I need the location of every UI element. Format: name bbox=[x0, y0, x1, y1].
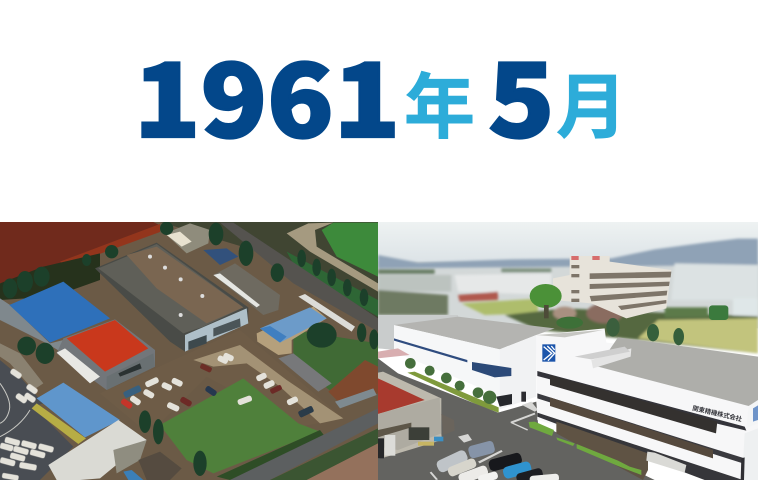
title: date 1961年5月: 年 bbox=[404, 69, 475, 148]
title: date 1961年5月 bbox=[134, 23, 627, 167]
building: blue and red roof factory bbox=[0, 282, 155, 390]
title: date 1961年5月: 月 bbox=[556, 69, 627, 148]
parked cars bbox=[435, 440, 559, 480]
title: date 1961年5月: 1961 bbox=[134, 23, 400, 167]
photo: aerial view of the factory in 1961 bbox=[0, 222, 379, 480]
building: lower-left sheds and office bbox=[32, 383, 182, 480]
building sign: company name: 関東精機株式会社 bbox=[692, 403, 744, 423]
asphalt car park bbox=[378, 358, 655, 480]
parking and crosswalk road markings bbox=[430, 402, 538, 480]
trees along the road bbox=[3, 222, 379, 476]
small red-roofed shed bbox=[378, 372, 444, 458]
photo: present-day headquarters building bbox=[378, 222, 758, 480]
buildings: small rear workshops bbox=[165, 223, 355, 355]
distant office tower bbox=[553, 256, 671, 318]
hedge and shrubs along warehouse bbox=[405, 358, 499, 413]
distant scenery: mountains, town and green field bbox=[378, 239, 758, 353]
hedges along main building bbox=[529, 422, 641, 475]
building: large grey roof factory bbox=[95, 243, 248, 352]
parked cars bbox=[0, 352, 314, 480]
trees beyond the buildings bbox=[530, 284, 728, 345]
main office building bbox=[536, 328, 758, 480]
title: date 1961年5月: 5 bbox=[488, 23, 555, 167]
company logo on building bbox=[542, 344, 555, 362]
left white warehouse building bbox=[378, 315, 555, 409]
